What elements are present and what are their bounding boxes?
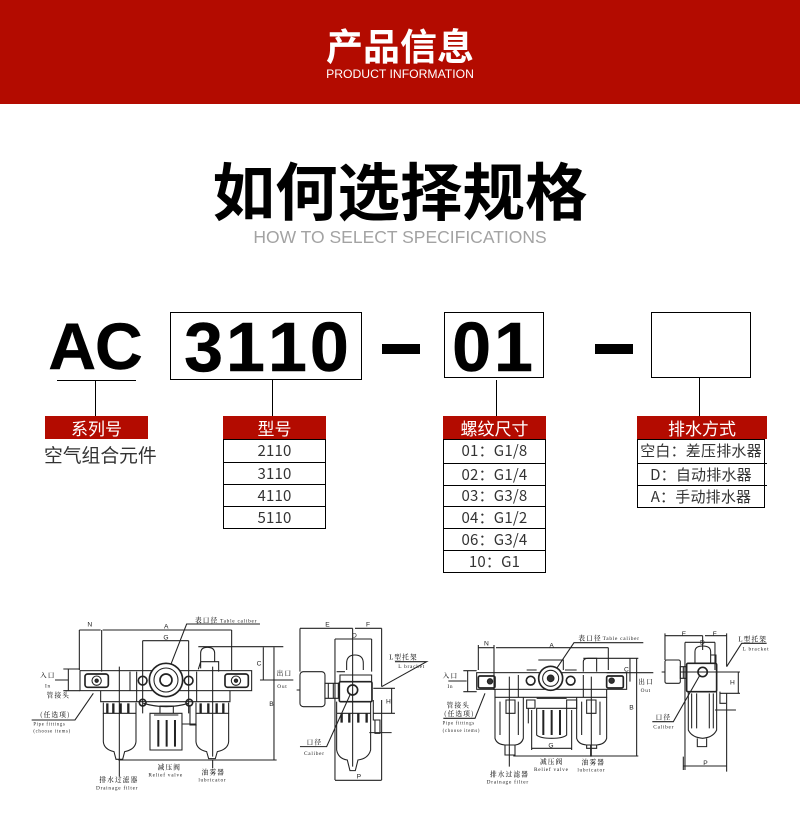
side view unit bbox=[680, 646, 726, 747]
connector bbox=[699, 378, 700, 416]
series header: 系列号 bbox=[71, 415, 122, 440]
labels: Caliber bbox=[304, 751, 325, 757]
connector bbox=[95, 380, 96, 416]
row 02: 02：G1/4 bbox=[462, 464, 527, 485]
row A: A：手动排水器 bbox=[651, 486, 751, 507]
labels: 油雾器 bbox=[202, 767, 225, 777]
labels bbox=[443, 631, 769, 786]
row 3110: 3110 bbox=[257, 463, 292, 484]
header banner bbox=[0, 0, 800, 104]
labels: G bbox=[548, 742, 554, 749]
panel: thread size table bbox=[443, 415, 546, 573]
bracket body bbox=[477, 660, 627, 697]
labels: 减压阀 bbox=[540, 756, 563, 766]
header title: 产品信息 bbox=[326, 17, 474, 71]
lubricator bowl bbox=[577, 677, 607, 757]
labels: 减压阀 bbox=[158, 761, 181, 771]
labels: Relief valve bbox=[534, 766, 569, 773]
labels: 排水过滤器 bbox=[490, 769, 529, 779]
labels: C bbox=[257, 660, 262, 667]
model box: 3110 bbox=[184, 308, 352, 386]
labels: 表口径 bbox=[195, 615, 218, 625]
labels: 口径 bbox=[307, 736, 322, 746]
row 04: 04：G1/2 bbox=[462, 507, 527, 528]
side dimensions bbox=[297, 628, 427, 780]
labels: Out bbox=[277, 684, 288, 690]
drawing: front view model A bbox=[32, 615, 427, 791]
labels: 管接头 bbox=[47, 689, 70, 699]
thread header bbox=[443, 416, 546, 439]
labels: D bbox=[352, 632, 357, 639]
labels: Table caliber bbox=[220, 619, 257, 625]
labels: Pipe fittings bbox=[33, 722, 66, 727]
labels: 管接头 bbox=[447, 699, 470, 709]
labels: F bbox=[366, 622, 370, 629]
labels: 入口 bbox=[40, 669, 56, 679]
labels: L型托架 bbox=[389, 651, 418, 661]
connector bbox=[496, 380, 497, 416]
labels: Drainage filter bbox=[96, 784, 138, 791]
labels: N bbox=[484, 640, 489, 647]
labels: Out bbox=[641, 688, 651, 694]
row 2110: 2110 bbox=[257, 440, 292, 461]
labels: In bbox=[45, 683, 51, 689]
connector bbox=[272, 380, 273, 416]
english subheading: HOW TO SELECT SPECIFICATIONS bbox=[253, 227, 547, 247]
main heading: 如何选择规格 bbox=[212, 142, 588, 233]
series description: 空气组合元件 bbox=[44, 441, 157, 468]
labels: E bbox=[682, 631, 687, 638]
labels: C bbox=[624, 667, 629, 674]
drain header bbox=[637, 416, 767, 439]
labels: lubricator bbox=[198, 778, 226, 784]
row 3110 bbox=[223, 462, 326, 485]
labels: Drainage filter bbox=[487, 779, 529, 786]
labels: (choose items) bbox=[33, 729, 71, 734]
blank box bbox=[651, 312, 751, 378]
labels: F bbox=[713, 631, 717, 638]
labels: Pipe fittings bbox=[443, 722, 475, 727]
labels: 入口 bbox=[443, 670, 458, 680]
row 03 bbox=[443, 485, 546, 507]
labels: 出口 bbox=[638, 676, 654, 686]
side view gauge bbox=[665, 660, 680, 683]
model header bbox=[223, 416, 326, 439]
drain header: 排水方式 bbox=[668, 415, 736, 440]
labels: (choose items) bbox=[443, 729, 480, 734]
thread header: 螺纹尺寸 bbox=[460, 415, 528, 440]
code segment: drain blank bbox=[651, 312, 751, 416]
row 4110: 4110 bbox=[257, 485, 292, 506]
lubricator dome bbox=[198, 647, 219, 672]
side view gauge bbox=[300, 672, 325, 707]
labels: 出口 bbox=[277, 667, 292, 677]
labels: E bbox=[325, 622, 330, 629]
row D: D：自动排水器 bbox=[650, 464, 752, 485]
labels: Relief valve bbox=[148, 772, 183, 779]
labels: H bbox=[730, 680, 735, 687]
row 04 bbox=[443, 506, 546, 529]
side view unit bbox=[325, 655, 380, 771]
labels: P bbox=[703, 760, 708, 767]
labels: 油雾器 bbox=[582, 757, 605, 767]
row 10: 10：G1 bbox=[469, 551, 520, 572]
row 03: 03：G3/8 bbox=[462, 485, 527, 506]
row 2110 bbox=[223, 439, 326, 463]
row 10 bbox=[443, 550, 546, 573]
panel: series bbox=[44, 415, 157, 468]
labels: L bracket bbox=[398, 664, 425, 670]
row 06 bbox=[443, 528, 546, 551]
model header: 型号 bbox=[258, 415, 292, 440]
row 01 bbox=[443, 439, 546, 464]
regulator gauge ring bbox=[539, 666, 563, 690]
regulator gauge ring bbox=[149, 663, 183, 697]
dash bbox=[595, 344, 633, 354]
labels: A bbox=[549, 642, 554, 649]
labels: 表口径 bbox=[578, 633, 602, 643]
drawing: front view model B bbox=[443, 631, 769, 786]
lubricator bowl bbox=[182, 667, 229, 759]
dash bbox=[382, 344, 420, 354]
row 5110 bbox=[223, 506, 326, 529]
labels: (任选项) bbox=[40, 709, 71, 719]
dimension lines bbox=[443, 643, 653, 767]
filter bowl bbox=[495, 677, 523, 755]
header subtitle: PRODUCT INFORMATION bbox=[326, 67, 474, 81]
labels: Caliber bbox=[653, 724, 674, 730]
row 02 bbox=[443, 463, 546, 486]
row 5110: 5110 bbox=[257, 507, 292, 528]
AC text: AC bbox=[48, 309, 142, 383]
labels: G bbox=[163, 634, 169, 641]
labels: L型托架 bbox=[738, 633, 767, 643]
labels: 排水过滤器 bbox=[99, 774, 138, 784]
relief valve body bbox=[527, 698, 577, 738]
series header bbox=[45, 416, 148, 439]
labels: Table caliber bbox=[603, 636, 640, 642]
underline bbox=[57, 380, 136, 381]
row 06: 06：G3/4 bbox=[462, 529, 527, 550]
thread box: 01 bbox=[452, 308, 536, 386]
row 4110 bbox=[223, 484, 326, 507]
labels: L bracket bbox=[743, 646, 769, 652]
labels: B bbox=[629, 704, 634, 711]
labels: D bbox=[700, 639, 705, 646]
labels: A bbox=[164, 624, 169, 631]
labels: In bbox=[447, 684, 453, 690]
relief valve body bbox=[143, 703, 189, 750]
dimension lines bbox=[32, 624, 293, 777]
technical drawings bbox=[32, 615, 769, 791]
panel: drain method table bbox=[637, 415, 767, 508]
labels: B bbox=[269, 701, 274, 708]
row blank: 空白：差压排水器 bbox=[640, 440, 762, 461]
panel: model table bbox=[223, 415, 326, 529]
side dimensions bbox=[652, 633, 767, 772]
row 01: 01：G1/8 bbox=[462, 440, 527, 461]
labels: 口径 bbox=[656, 711, 671, 721]
labels: lubricator bbox=[577, 768, 605, 774]
labels: N bbox=[87, 622, 92, 629]
labels: H bbox=[386, 698, 391, 705]
lubricator cap bbox=[583, 658, 597, 672]
filter bowl bbox=[103, 667, 136, 760]
labels bbox=[33, 615, 425, 791]
labels: (任选项) bbox=[444, 708, 475, 718]
labels: P bbox=[357, 774, 362, 781]
bracket body bbox=[80, 671, 252, 706]
